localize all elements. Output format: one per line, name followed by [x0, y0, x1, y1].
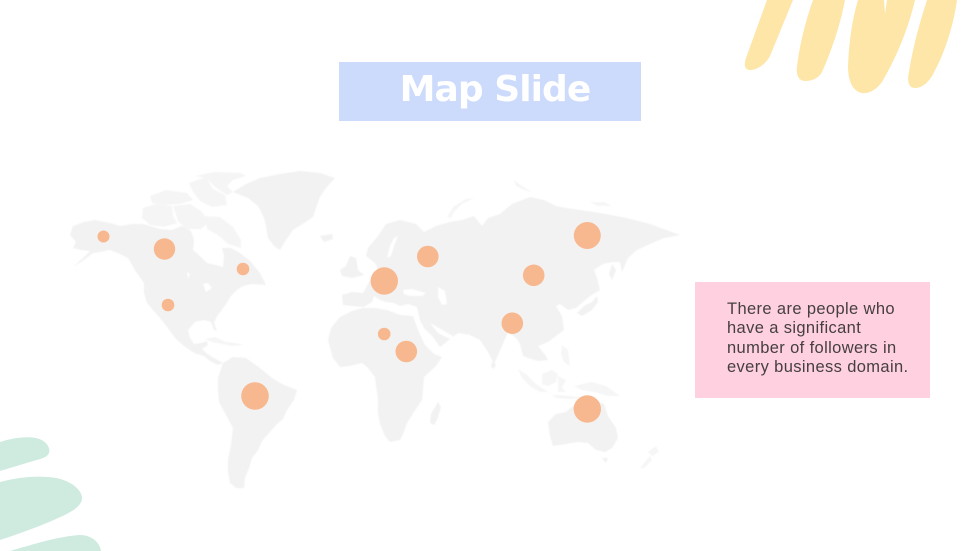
map: Great Britain and Ireland — [340, 256, 364, 278]
map: Tasmania — [602, 458, 608, 463]
map: Africa — [328, 308, 442, 442]
map: inland water — [187, 236, 456, 348]
callout: description: number of followers in — [727, 338, 897, 356]
map: Australia — [548, 398, 618, 452]
map: Greenland — [233, 171, 335, 250]
map: Canadian Arctic islands — [142, 172, 246, 248]
map: Svalbard and northern islands — [514, 180, 532, 192]
callout: description: There are people who — [727, 300, 895, 318]
decoration: green brush strokes — [0, 437, 101, 551]
map: South America — [218, 357, 297, 488]
map: Cuba and Caribbean — [205, 337, 244, 346]
map: Sakhalin — [609, 264, 616, 280]
callout: description: every business domain. — [727, 358, 908, 376]
callout: description: have a significant — [727, 319, 861, 337]
decoration: yellow brush strokes — [745, 0, 957, 93]
map: Novaya Zemlya — [447, 198, 474, 218]
callout: description — [695, 282, 930, 398]
title: Map Slide — [400, 69, 590, 110]
map: North and Central America — [70, 220, 266, 365]
map: Iceland — [320, 234, 333, 242]
map: Sri Lanka — [491, 362, 496, 369]
map: Southeast Asia islands — [518, 345, 620, 399]
map: Eurasia — [342, 197, 680, 364]
map: Japan — [577, 296, 598, 316]
world map — [70, 171, 680, 488]
title — [339, 62, 641, 121]
location markers — [98, 222, 601, 423]
map: Madagascar — [430, 402, 441, 425]
map: New Zealand — [648, 446, 659, 456]
